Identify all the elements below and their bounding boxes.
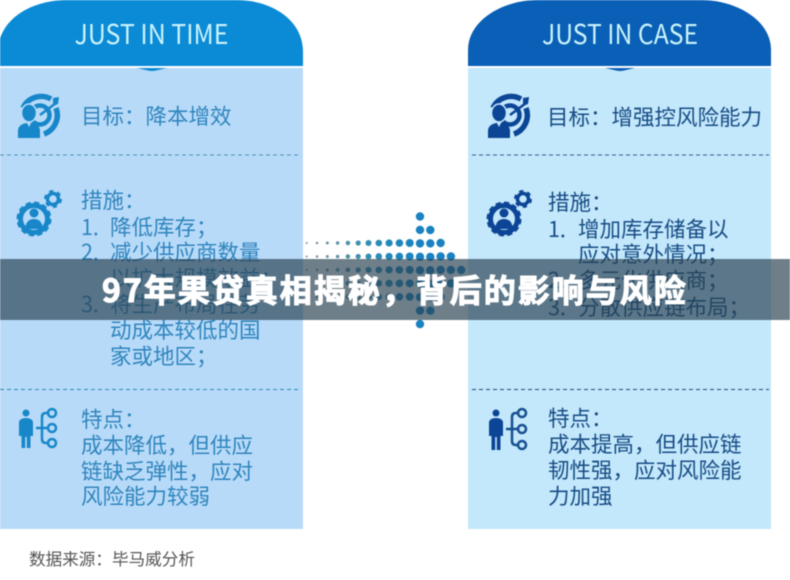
text: measures xyxy=(81,184,282,371)
text: measures xyxy=(548,186,750,322)
text: characteristics: 成本提高，但供应链 xyxy=(548,428,742,459)
icon: gears with person xyxy=(488,192,530,234)
text: measures: 应对意外情况； xyxy=(578,238,729,269)
text: measures: 措施： xyxy=(81,184,146,215)
text: measures: 多元化供应商； xyxy=(578,264,729,295)
panel body: just in time xyxy=(0,68,303,529)
icon: person with tree xyxy=(489,409,526,450)
text: measures: 降低库存； xyxy=(110,211,218,242)
text: characteristics xyxy=(548,402,742,511)
title: 97年果贷真相揭秘，背后的影响与风险 xyxy=(102,266,688,312)
text: measures: 3. xyxy=(548,291,566,322)
text: measures: 增加库存储备以 xyxy=(578,213,729,244)
text: measures: 家或地区； xyxy=(110,340,218,371)
panel: just in case xyxy=(468,0,771,529)
text: goal: 目标：降本增效 xyxy=(81,100,232,131)
text: characteristics: 特点： xyxy=(81,403,146,434)
text: data source: 数据来源：毕马威分析 xyxy=(29,546,195,570)
text: measures: 将生产布局在劳 xyxy=(110,288,261,319)
text: measures: 1. xyxy=(548,213,566,244)
panel body: just in case xyxy=(468,68,771,529)
icon: gears with person xyxy=(18,192,60,234)
text: measures: 1. xyxy=(81,211,99,242)
header: just in case: JUST IN CASE xyxy=(542,13,698,52)
text: measures: 措施： xyxy=(548,186,613,217)
title band xyxy=(0,259,790,320)
text: characteristics: 特点： xyxy=(548,402,613,433)
text: characteristics xyxy=(81,403,253,511)
arrow: dotted right arrow xyxy=(307,216,461,325)
text: measures: 减少供应商数量 xyxy=(110,236,261,267)
text: characteristics: 风险能力较弱 xyxy=(81,480,210,511)
header: just in time xyxy=(0,0,303,71)
text: measures: 以扩大规模效益； xyxy=(110,262,282,293)
text: goal: 目标：增强控风险能力 xyxy=(547,101,762,132)
panel: just in time xyxy=(0,0,303,529)
icon: target with person xyxy=(488,96,529,138)
text: measures: 动成本较低的国 xyxy=(110,314,261,345)
text: characteristics: 成本降低，但供应 xyxy=(81,429,253,460)
icon: person with tree xyxy=(19,409,56,448)
text: measures: 2. xyxy=(81,236,99,267)
text: characteristics: 链缺乏弹性，应对 xyxy=(81,455,253,486)
text: characteristics: 力加强 xyxy=(548,480,613,511)
text: measures: 3. xyxy=(81,288,99,319)
text: measures: 分散供应链布局； xyxy=(578,291,750,322)
header: just in case xyxy=(468,0,771,71)
icon: target with person xyxy=(18,96,59,138)
text: characteristics: 韧性强，应对风险能 xyxy=(548,454,742,485)
header: just in time: JUST IN TIME xyxy=(74,13,228,52)
text: measures: 2. xyxy=(548,264,566,295)
